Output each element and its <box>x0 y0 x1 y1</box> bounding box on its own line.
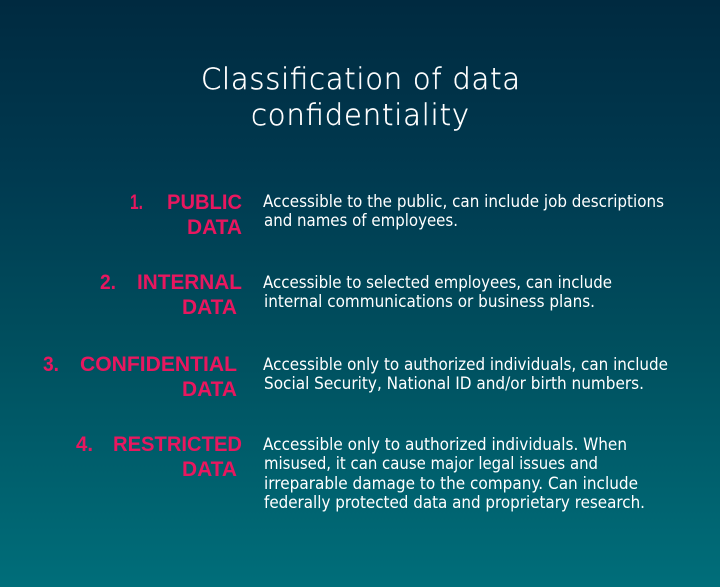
item 4 description <box>263 435 645 512</box>
title: Classification of data <box>201 62 520 96</box>
item 4 description: irreparable damage to the company. Can include <box>264 474 638 493</box>
item 2 heading: internal data <box>100 271 242 319</box>
item 3 heading: confidential data <box>43 353 237 401</box>
item 1 description: Accessible to the public, can include job descriptions <box>263 192 664 211</box>
item 4 heading: restricted data: RESTRICTED <box>113 433 242 456</box>
item 2 description: internal communications or business plans. <box>264 292 595 311</box>
item 4 heading: restricted data: DATA <box>182 458 237 481</box>
item 2 heading: internal data: DATA <box>182 296 237 319</box>
item 3 heading: confidential data: CONFIDENTIAL <box>80 353 237 376</box>
item 1 heading: public data: DATA <box>187 216 242 239</box>
item 1 heading: public data: PUBLIC <box>167 191 242 214</box>
item 3 heading: confidential data: DATA <box>182 378 237 401</box>
item 4 heading: restricted data <box>76 433 242 481</box>
item 2 heading: internal data: INTERNAL <box>137 271 242 294</box>
item 2 description <box>263 273 612 311</box>
item 4 description: misused, it can cause major legal issues and <box>264 454 598 473</box>
item 3 description: Social Security, National ID and/or birth numbers. <box>264 374 644 393</box>
item 1 heading: public data <box>130 191 242 239</box>
item 1 heading: public data: 1. <box>130 191 143 214</box>
item 4 description: Accessible only to authorized individuals. When <box>263 435 627 454</box>
item 1 description: and names of employees. <box>264 211 458 230</box>
item 3 description <box>263 355 668 393</box>
item 3 heading: confidential data: 3. <box>43 353 59 376</box>
item 4 heading: restricted data: 4. <box>76 433 93 456</box>
item 2 heading: internal data: 2. <box>100 271 116 294</box>
item 2 description: Accessible to selected employees, can include <box>263 273 612 292</box>
title <box>201 62 520 132</box>
title: confidentiality <box>251 98 469 132</box>
item 4 description: federally protected data and proprietary research. <box>264 493 645 512</box>
item 3 description: Accessible only to authorized individuals, can include <box>263 355 668 374</box>
item 1 description <box>263 192 664 230</box>
